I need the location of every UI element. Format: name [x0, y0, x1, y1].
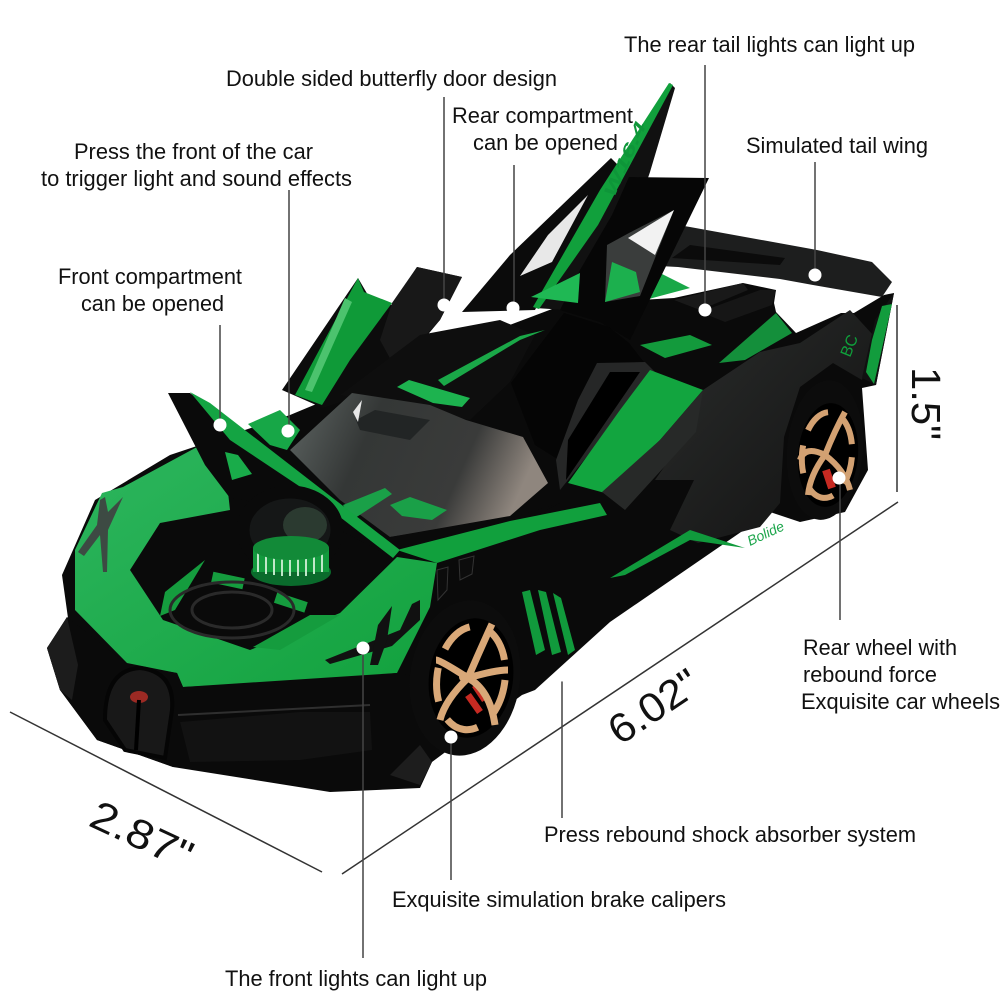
- length dimension label: 6.02": [599, 659, 708, 753]
- width dimension label: 2.87": [83, 791, 201, 879]
- label: rear compartment: [452, 103, 634, 155]
- side green stripe: [397, 503, 607, 563]
- engine bay details: [160, 560, 340, 650]
- label: front compartment: Front compartment: [58, 264, 243, 289]
- side skirt: Bolide: [745, 518, 787, 549]
- label: rear wheel: [801, 635, 1000, 714]
- label: front lights: The front lights can light up: [225, 966, 487, 991]
- small green panel behind hood: [248, 410, 300, 450]
- label: butterfly door: Double sided butterfly door design: [226, 66, 557, 91]
- green side gills: [522, 590, 575, 655]
- rear deck green accents: [640, 313, 792, 363]
- side skirt: [610, 518, 787, 578]
- side vents: [437, 556, 474, 600]
- air filter: [251, 536, 331, 586]
- label: tail wing: Simulated tail wing: [746, 133, 928, 158]
- roof with green stripe: [340, 320, 545, 420]
- raised rear compartment door: W16.4: [600, 118, 651, 200]
- rear side panel: [655, 310, 873, 543]
- rear wing: [556, 210, 892, 297]
- front wheel: [400, 593, 530, 763]
- X badge on nose: [78, 497, 123, 572]
- leader lines: [220, 65, 840, 958]
- raised rear compartment door: [462, 83, 709, 340]
- open front hood: [168, 392, 400, 568]
- label: rear wheel: Exquisite car wheels: [801, 689, 1000, 714]
- label: light and sound effects: to trigger light and sound effects: [41, 166, 352, 191]
- car body base: [47, 283, 894, 792]
- callout dots: [214, 268, 846, 744]
- rear fin with green logo: [838, 293, 894, 385]
- dimension lines: [10, 305, 898, 874]
- windshield and cockpit: [290, 393, 560, 545]
- label: brake calipers: Exquisite simulation brake calipers: [392, 887, 726, 912]
- label: rear compartment: can be opened: [473, 130, 618, 155]
- label: rear wheel: rebound force: [803, 662, 937, 687]
- label: light and sound effects: Press the front of the car: [74, 139, 313, 164]
- tail lights: [674, 283, 776, 322]
- rear deck green behind the door: [605, 262, 690, 303]
- far butterfly door: [282, 267, 462, 408]
- label: front compartment: [58, 264, 243, 316]
- X badge with front light: [325, 600, 420, 665]
- near butterfly door: [511, 313, 703, 510]
- label: rear wheel: Rear wheel with: [803, 635, 957, 660]
- car illustration: [47, 83, 894, 792]
- height dimension label: 1.5": [903, 367, 949, 440]
- rear wheel: [781, 377, 869, 523]
- label: rear tail lights: The rear tail lights can light up: [624, 32, 915, 57]
- label: front compartment: can be opened: [81, 291, 224, 316]
- front fender and green nose: [75, 447, 437, 687]
- front bumper and grille: [47, 617, 435, 785]
- label: rear compartment: Rear compartment: [452, 103, 634, 128]
- label: shock absorber: Press rebound shock absorber system: [544, 822, 916, 847]
- rear fin with green logo: BC: [838, 333, 862, 359]
- label: light and sound effects: [41, 139, 352, 191]
